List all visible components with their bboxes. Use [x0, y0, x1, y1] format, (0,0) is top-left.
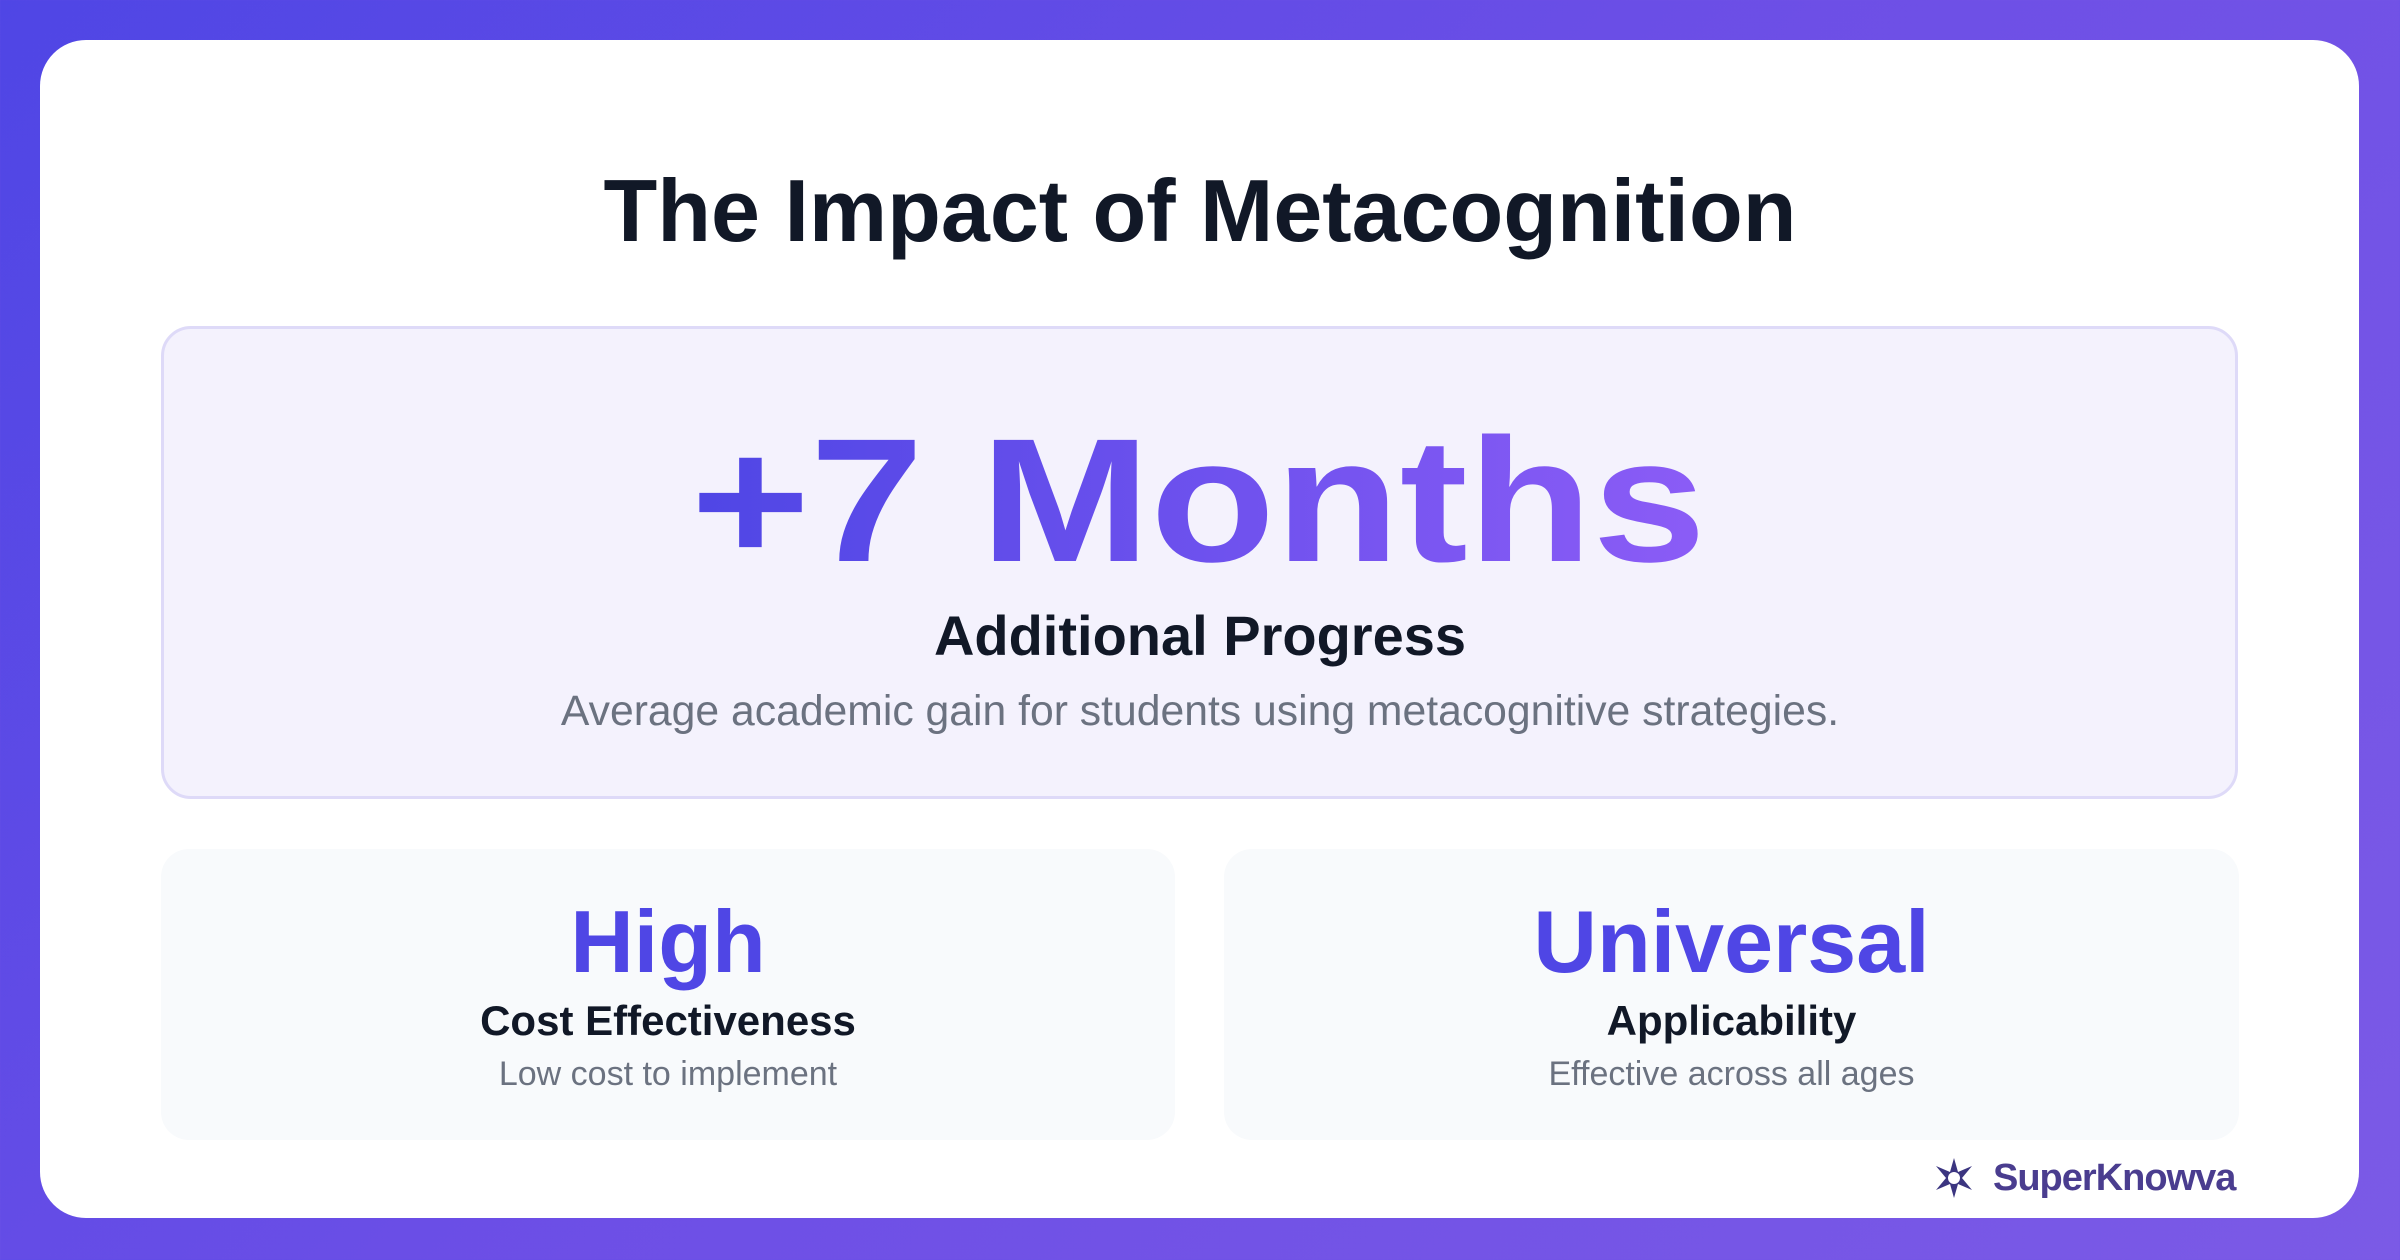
logo — [1936, 1157, 2237, 1199]
panel: cost effectiveness — [161, 849, 1175, 1140]
icon: logo star — [1936, 1158, 1972, 1198]
panel: applicability — [1224, 849, 2239, 1140]
panel: main stat — [161, 326, 2238, 799]
note: Low cost to implement — [499, 1055, 837, 1093]
big number: +7 Months — [691, 403, 1706, 599]
note: Effective across all ages — [1548, 1055, 1914, 1093]
brand name: SuperKnowva — [1993, 1157, 2235, 1199]
label: Cost Effectiveness — [480, 997, 856, 1044]
title: The Impact of Metacognition — [604, 161, 1796, 260]
stat: High: High — [570, 892, 766, 991]
description: Average academic gain for students using metacognitive strategies. — [561, 687, 1839, 735]
stat: Universal: Universal — [1533, 892, 1930, 991]
subheading: Additional Progress — [934, 604, 1466, 667]
label: Applicability — [1607, 997, 1856, 1044]
